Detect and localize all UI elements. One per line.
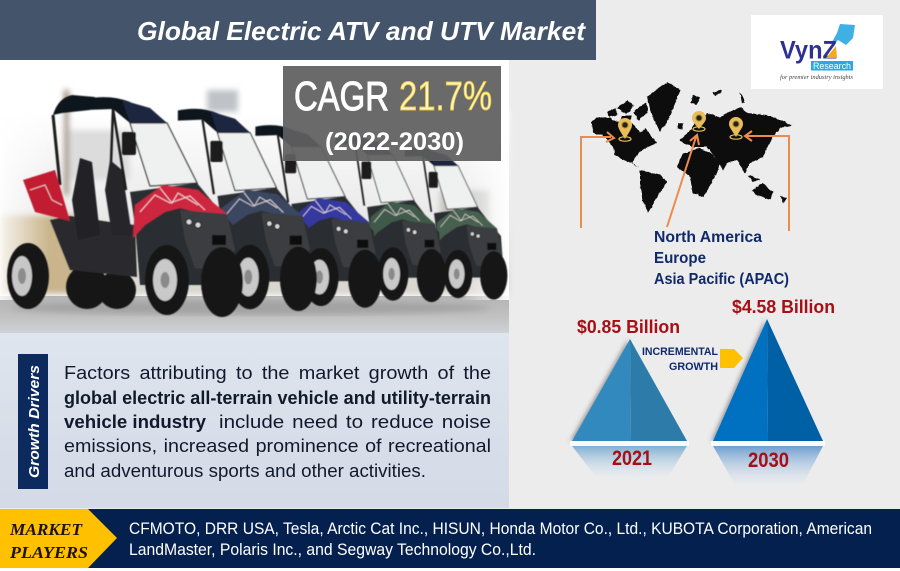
title banner: Global Electric ATV and UTV Market [137,16,586,46]
growth drivers text [64,362,491,481]
growth drivers text: global electric all-terrain vehicle and utility-terrain [64,387,491,408]
chart: pyramid 2021 [570,316,689,482]
arrow: incremental growth [720,349,743,368]
market players badge: PLAYERS [9,543,88,562]
growth drivers text: and adventurous sports and other activities. [64,460,426,481]
growth drivers text: emissions, increased prominence of recreational [64,435,491,456]
incremental growth label: GROWTH [669,361,718,373]
logo: VynZ Research [751,15,883,89]
market players badge: MARKET [9,520,83,539]
world map [591,82,793,213]
vehicle 5 (camouflage green) [405,148,507,300]
growth drivers label: Growth Drivers [26,365,43,478]
CAGR callout: (2022-2030) [325,128,464,156]
CAGR callout [283,66,501,161]
region list: North America [654,229,762,246]
vehicle 4 (camouflage green) [336,135,446,302]
region list [654,229,789,288]
arrow: Europe [667,135,699,227]
CAGR callout: 21.7% [399,73,492,119]
chart: pyramid 2021: $0.85 Billion [577,316,680,337]
icon: location pin Europe [692,111,706,131]
logo: VynZ Research: VynZ [780,36,837,64]
region list: Europe [654,250,706,267]
growth drivers text: include need to reduce noise [219,411,491,432]
growth drivers text: vehicle industry [64,411,207,432]
chart: pyramid 2030: $4.58 Billion [732,296,835,317]
arrow: North America [581,132,614,228]
logo: VynZ Research: for premier industry insights [780,74,853,81]
growth drivers text: Factors attributing to the market growth of the [64,362,491,383]
growth drivers label [18,354,48,489]
panel: vehicle photo [0,60,509,333]
panel: growth drivers [0,333,509,508]
chart: pyramid 2021: 2021 [612,447,652,470]
CAGR callout: CAGR [294,73,389,119]
arrow: Asia Pacific [745,131,789,231]
incremental growth label [642,346,718,373]
chart: pyramid 2030 [711,296,835,490]
region list: Asia Pacific (APAC) [654,271,789,288]
vehicle 2 (navy) [178,109,317,311]
icon: location pin Asia Pacific [729,117,743,139]
chart: pyramid 2030: 2030 [748,449,789,472]
icon: location pin North America [618,118,632,141]
company list [129,519,872,559]
panel: market players [0,509,900,571]
company list: LandMaster, Polaris Inc., and Segway Technology Co.,Ltd. [129,540,536,559]
logo: VynZ Research: Research [813,61,851,71]
market players badge [0,509,117,568]
title banner [0,0,596,60]
vehicle 3 (blue) [255,125,382,308]
vehicle 1 (red) [7,95,243,317]
incremental growth label: INCREMENTAL [642,346,718,358]
